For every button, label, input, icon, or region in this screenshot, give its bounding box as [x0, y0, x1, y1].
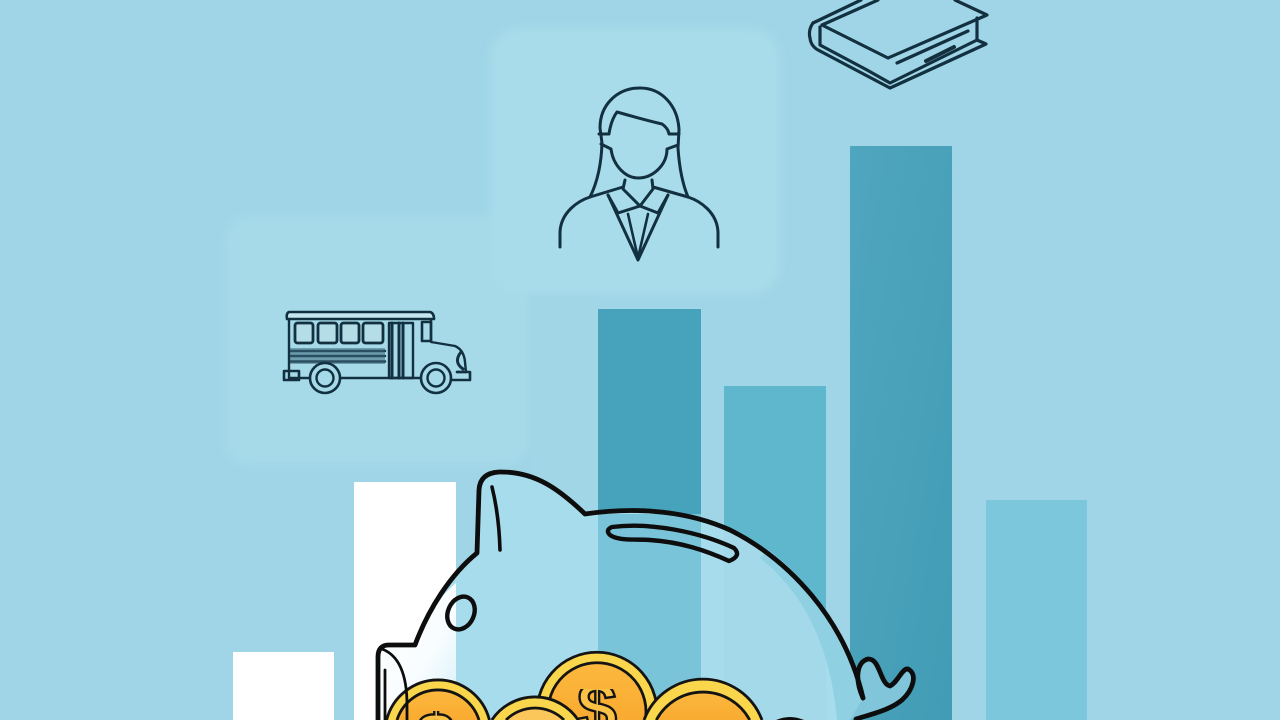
teal bar seen through glass [598, 514, 701, 720]
eye [442, 592, 480, 634]
glass rim band [760, 550, 863, 720]
tail fill [850, 659, 913, 720]
snout details [382, 649, 407, 720]
bar chart [233, 146, 1087, 720]
icon: book [809, 0, 987, 88]
bar 4 medium [724, 386, 826, 720]
bar 3 teal [598, 309, 701, 720]
icon: school bus [284, 312, 470, 393]
panel: person backdrop [490, 28, 780, 295]
coin 2 [492, 697, 578, 720]
coin 4 [644, 679, 762, 720]
bar 2 white [354, 482, 456, 720]
tail [856, 659, 913, 719]
coin 1 [387, 680, 489, 720]
foot hint [776, 717, 804, 720]
faint bar [531, 296, 599, 720]
coin 3 back [537, 652, 657, 720]
bar 5 tallest [850, 146, 952, 720]
white bar seen through glass [375, 583, 456, 720]
bar 6 light [986, 500, 1087, 720]
bar 1 white [233, 652, 334, 720]
coin slot [608, 526, 737, 561]
pig outline [378, 472, 863, 720]
ear inner line [492, 487, 500, 550]
panel: bus backdrop [225, 216, 530, 465]
medium bar seen through glass [724, 527, 826, 720]
icon: woman in suit [560, 88, 718, 260]
piggy bank glass body [375, 471, 913, 720]
